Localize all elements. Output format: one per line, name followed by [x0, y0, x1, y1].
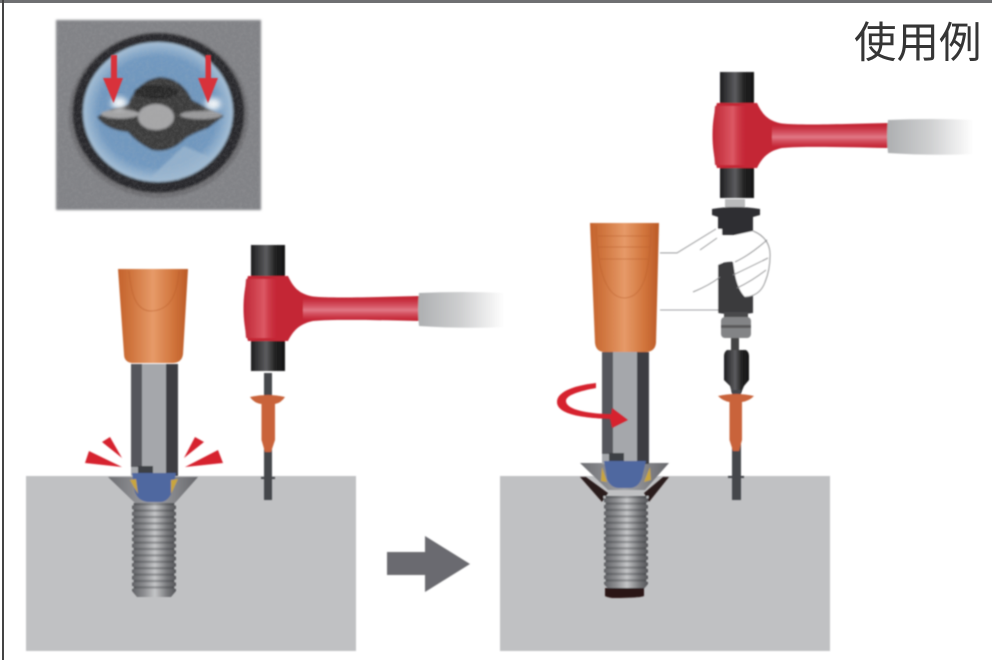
curved rotation arrow [557, 383, 628, 428]
process arrow [387, 536, 470, 592]
black recess wedges [580, 477, 608, 502]
screw thread [132, 503, 176, 597]
photo detail: highlights at arrow tips [111, 97, 221, 110]
photo arrow: left [103, 55, 123, 103]
screw head [108, 477, 198, 503]
orange handle [118, 269, 188, 363]
silver neck [725, 199, 745, 208]
hex shaft [131, 364, 178, 476]
hand outlines [660, 229, 770, 310]
right: hammer [712, 72, 974, 198]
yellow wedges [601, 467, 607, 482]
photo detail: crushed recess [97, 77, 224, 151]
hand palm [660, 229, 722, 313]
tool grip [718, 262, 753, 314]
chuck [724, 350, 749, 393]
screw head [580, 463, 669, 490]
panel: left material block [26, 476, 356, 651]
right: hand gripping tool [660, 199, 770, 393]
title: 使用例 [854, 20, 982, 68]
photo arrow: right [198, 55, 218, 103]
photo detail: light wedge [150, 146, 212, 180]
panel: right material block [500, 476, 830, 651]
bolt tip [605, 588, 644, 598]
left: punch [250, 373, 285, 500]
hex shaft [602, 352, 649, 464]
orange handle [590, 223, 659, 352]
left: screw extractor assembly [108, 269, 198, 597]
fingers [733, 231, 770, 297]
bolt [604, 496, 648, 590]
yellow wedges [130, 479, 138, 494]
blue tip [132, 473, 176, 502]
impact marks [85, 437, 223, 467]
photo: damaged screw head [56, 20, 261, 210]
blue tip [604, 461, 646, 488]
photo texture [56, 20, 261, 210]
tool collar [712, 207, 760, 235]
tool link [724, 312, 748, 318]
right: loosened screw assembly [580, 223, 669, 598]
tool coupling [721, 317, 751, 338]
left: hammer [244, 245, 505, 371]
right: punch [718, 390, 754, 500]
